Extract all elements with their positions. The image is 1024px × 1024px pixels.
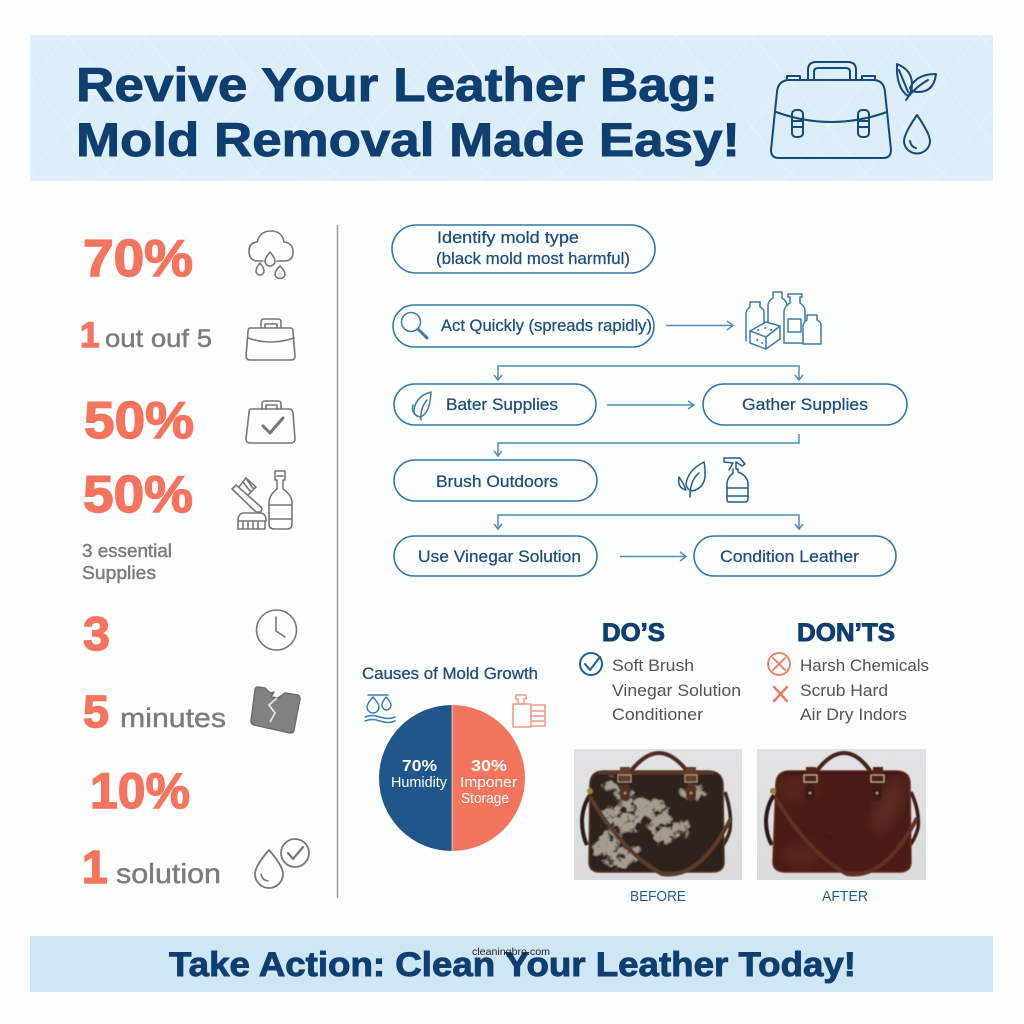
arrow <box>666 321 733 330</box>
banner background <box>30 35 993 181</box>
step: act quickly <box>393 305 654 347</box>
icon: bag with check <box>246 401 295 443</box>
step: gather supplies <box>703 384 907 425</box>
slice label: improper storage: 30% <box>471 758 507 775</box>
slice label: improper storage: Storage <box>461 791 509 807</box>
icon: leaf in pill <box>412 392 431 420</box>
icon: leaf <box>679 462 705 497</box>
list: Air Dry Indors <box>800 705 907 724</box>
icon: supplies bottles <box>746 292 821 349</box>
icon: magnifier <box>402 312 427 338</box>
step: bater supplies: Bater Supplies <box>446 396 558 414</box>
title: Mold Removal Made Easy! <box>76 113 740 166</box>
stat: 5 minutes: 5 <box>83 686 109 737</box>
step: use vinegar solution: Use Vinegar Solution <box>418 548 581 566</box>
stat: 5 minutes <box>83 686 226 737</box>
arrow <box>607 401 694 409</box>
text: 3 essential supplies: 3 essential <box>82 541 172 561</box>
list <box>612 656 741 724</box>
stat: 10%: 10% <box>90 763 190 819</box>
footer banner <box>30 936 993 992</box>
chart title: Causes of Mold Growth <box>362 664 538 683</box>
icon: humidity <box>365 695 395 722</box>
icon: water drop <box>904 115 930 154</box>
icon: check circle <box>580 653 602 675</box>
icon: brush and bottle <box>232 471 292 529</box>
step: act quickly: Act Quickly (spreads rapidly) <box>441 317 652 335</box>
panel: don'ts <box>768 619 929 724</box>
slice label: humidity: 70% <box>402 758 437 775</box>
step: condition leather: Condition Leather <box>720 548 860 566</box>
list <box>800 656 929 724</box>
step: gather supplies: Gather Supplies <box>742 396 868 414</box>
stat: 1 out ouf 5 <box>80 316 212 355</box>
title <box>76 58 740 166</box>
step: identify mold type: Identify mold type <box>437 229 579 247</box>
stat: 1 solution: 1 <box>82 841 108 893</box>
slice label: improper storage: Imponer <box>460 775 517 791</box>
slice label: humidity <box>391 758 448 791</box>
icon: spray bottle <box>724 458 748 502</box>
call to action: Take Action: Clean Your Leather Today! <box>169 946 856 984</box>
icon: storage <box>513 695 545 727</box>
step: brush outdoors <box>394 460 597 501</box>
slice label: humidity: Humidity <box>391 775 448 791</box>
list: Conditioner <box>612 705 703 724</box>
icon: briefcase <box>771 62 891 158</box>
stat: 1 out ouf 5: out ouf 5 <box>105 325 212 353</box>
icon: cracked leather <box>251 687 300 733</box>
panel: process flow <box>392 225 907 576</box>
watermark: cleaningbro.com <box>472 946 550 958</box>
stat: 3: 3 <box>83 607 110 660</box>
step: use vinegar solution <box>394 536 597 576</box>
step: identify mold type <box>392 225 655 273</box>
slice label: improper storage <box>460 758 517 807</box>
step: identify mold type: (black mold most harmful) <box>436 250 630 268</box>
arrow <box>620 552 686 561</box>
stat: 1 out ouf 5: 1 <box>80 316 99 355</box>
photo: moldy bag before <box>574 749 742 880</box>
stat: 50% second: 50% <box>83 466 193 524</box>
icon: leaves <box>897 64 936 100</box>
list: Soft Brush <box>612 656 694 675</box>
stat: 5 minutes: minutes <box>120 703 226 733</box>
icon: x <box>774 687 787 701</box>
list: Harsh Chemicals <box>800 656 929 675</box>
divider <box>336 225 338 898</box>
label: before: BEFORE <box>630 889 686 905</box>
list: Scrub Hard <box>800 681 888 700</box>
label: after: AFTER <box>822 889 868 905</box>
pie chart <box>379 705 525 851</box>
panel: do's <box>580 619 741 724</box>
text: 3 essential supplies <box>82 541 172 583</box>
photo: restored bag after <box>757 749 926 880</box>
title: Revive Your Leather Bag: <box>76 58 718 111</box>
heading: DO’S <box>602 619 665 647</box>
connector: gather to brush <box>494 434 799 456</box>
text: 3 essential supplies: Supplies <box>82 563 156 583</box>
icon: rain cloud <box>249 231 293 278</box>
stat: 1 solution <box>82 841 221 893</box>
stat: 1 solution: solution <box>116 858 221 889</box>
list: Vinegar Solution <box>612 681 741 700</box>
footer background <box>30 936 993 992</box>
step: brush outdoors: Brush Outdoors <box>436 473 558 491</box>
icon: drop with check <box>255 839 309 888</box>
header banner <box>30 35 993 181</box>
stat: 50%: 50% <box>84 392 194 450</box>
connector: act to supplies <box>494 366 803 380</box>
connector: brush to vinegar and condition <box>494 515 803 529</box>
icon: x circle <box>768 653 790 675</box>
panel: causes of mold growth <box>362 664 545 851</box>
icon: clock <box>256 610 296 650</box>
stat: 70%: 70% <box>83 230 193 288</box>
step: bater supplies <box>394 384 596 425</box>
panel: statistics <box>80 230 309 893</box>
icon: bag <box>246 319 295 360</box>
heading: DON’TS <box>797 619 895 647</box>
step: condition leather <box>694 536 896 576</box>
